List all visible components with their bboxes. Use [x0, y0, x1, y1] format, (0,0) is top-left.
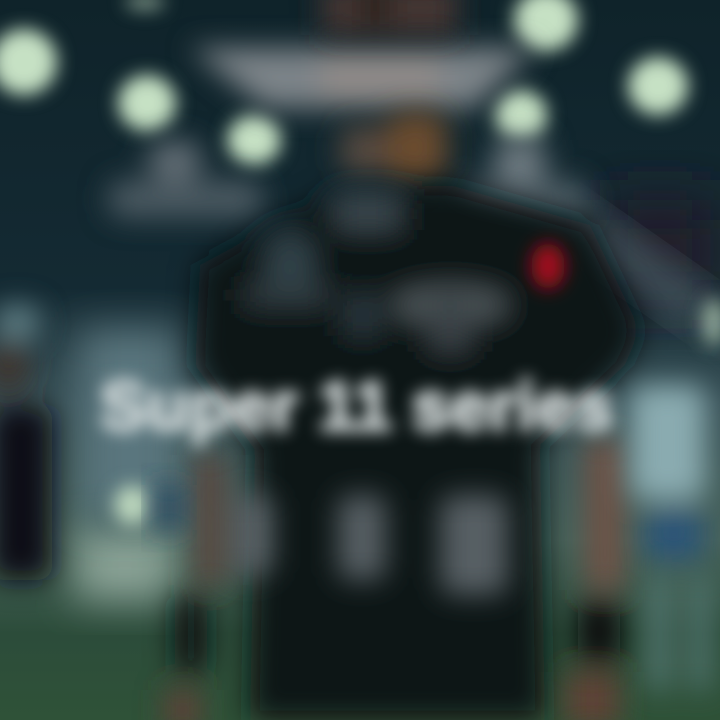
stadium stand structures — [108, 48, 588, 220]
red badge — [531, 243, 565, 289]
headline: Super 11 series — [100, 367, 614, 445]
background player right — [630, 385, 710, 690]
player torso — [195, 185, 640, 720]
player arms — [165, 440, 625, 720]
background player left — [0, 305, 52, 580]
central player — [165, 0, 640, 720]
stadium floodlights — [0, 0, 720, 525]
jersey stripes — [225, 495, 508, 595]
player head — [322, 0, 457, 182]
